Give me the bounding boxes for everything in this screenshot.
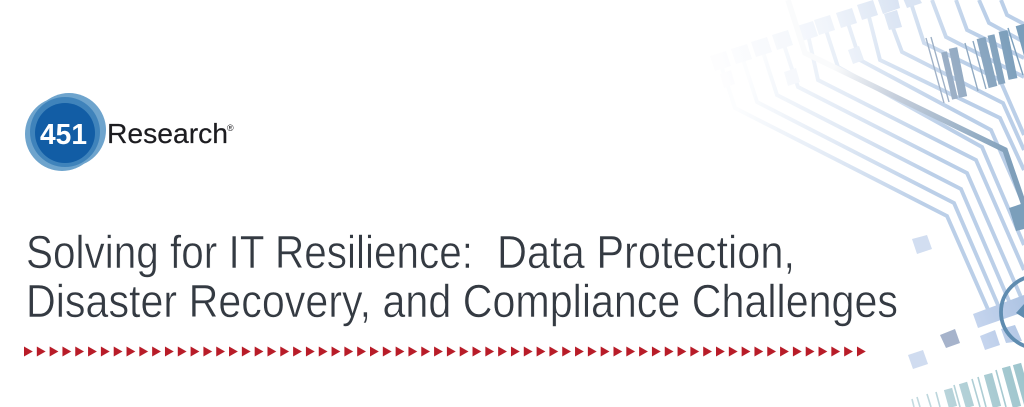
logo mark: 451 [40,119,87,151]
logo [25,93,234,171]
title: Disaster Recovery, and Compliance Challenges [26,275,898,327]
heavy pad [1009,203,1024,231]
title [26,226,898,327]
pale square [908,350,928,369]
light square [912,235,932,254]
ring pointer [1016,304,1024,318]
logo mark [25,93,106,171]
title: Solving for IT Resilience: [26,226,473,278]
lower barcode [912,364,1024,407]
circuit traces [720,0,1024,314]
heavy trace [788,0,1024,205]
logo wordmark: Research [107,118,228,149]
circuit pads [710,0,922,88]
red arrow divider [24,346,866,357]
upper barcode [926,25,1024,103]
steep-run pad group [973,295,1024,350]
registered mark: ® [227,123,234,133]
dark square [940,329,960,348]
title: Data Protection, [497,226,795,278]
ring [1001,276,1024,348]
circuit board decoration [710,0,1024,407]
